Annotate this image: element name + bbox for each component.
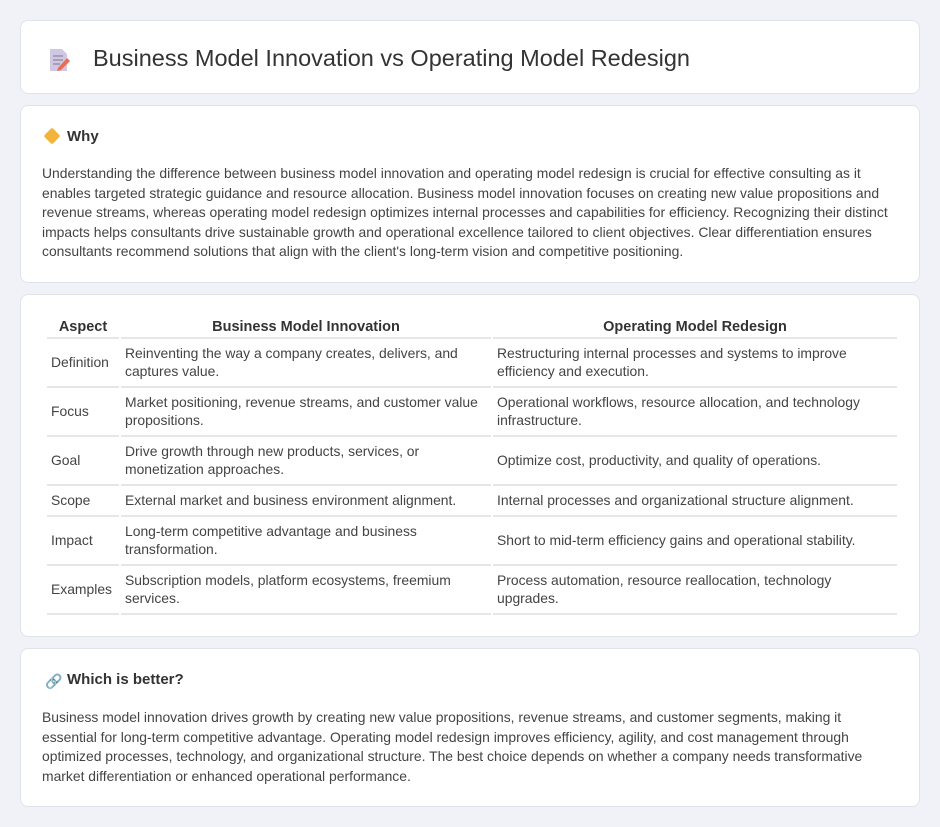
table: Operational workflows, resource allocation, and technology infrastructure.: [497, 394, 860, 428]
table: Business Model Innovation: [212, 318, 400, 334]
table: Focus: [51, 403, 89, 419]
table: Aspect: [59, 318, 107, 334]
panel: why: [20, 105, 920, 283]
table: Drive growth through new products, services, or monetization approaches.: [125, 443, 419, 477]
panel: comparison table: [20, 294, 920, 637]
icon: document: [50, 49, 70, 71]
icon: link: 🔗: [45, 673, 62, 689]
table: Scope: [51, 492, 90, 508]
table: [47, 318, 897, 615]
table: Process automation, resource reallocation, technology upgrades.: [497, 572, 831, 606]
table: Market positioning, revenue streams, and customer value propositions.: [125, 394, 478, 428]
text block: why: Understanding the difference between business model innovation and operating model redesign is crucial for effective consulting as it enables targeted strategic guidance and resource allocation. Business model innovation focuses on creating new value propositions and revenue streams, whereas operating model redesign optimizes internal processes and capabilities for efficiency. Recognizing their distinct impacts helps consultants drive sustainable growth and operational excellence tailored to client objectives. Clear differentiation ensures consultants recommend solutions that align with the client's long-term vision and competitive positioning.: [42, 165, 888, 259]
panel: title: [20, 20, 920, 94]
heading: why: Why: [67, 128, 99, 145]
table: Long-term competitive advantage and business transformation.: [125, 523, 417, 557]
table: Impact: [51, 532, 93, 548]
panel: which is better: [20, 648, 920, 807]
table: Subscription models, platform ecosystems, freemium services.: [125, 572, 451, 606]
table: Operating Model Redesign: [603, 318, 787, 334]
table: Short to mid-term efficiency gains and operational stability.: [497, 532, 856, 548]
table: Definition: [51, 354, 109, 370]
table: Goal: [51, 452, 80, 468]
table: Optimize cost, productivity, and quality of operations.: [497, 452, 821, 468]
text block: which is better: Business model innovation drives growth by creating new value propositions, revenue streams, and customer segments, making it essential for long-term competitive advantage. Operating model redesign improves efficiency, agility, and cost management through optimized processes, technology, and organizational structure. The best choice depends on whether a company needs transformative market differentiation or enhanced operational performance.: [42, 709, 862, 784]
heading: which is better: Which is better?: [67, 671, 184, 688]
title: Business Model Innovation vs Operating Model Redesign: [93, 45, 690, 71]
table: Internal processes and organizational structure alignment.: [497, 492, 854, 508]
table: Examples: [51, 581, 112, 597]
table: External market and business environment alignment.: [125, 492, 456, 508]
icon: diamond: [44, 128, 60, 144]
table: Restructuring internal processes and systems to improve efficiency and execution.: [497, 345, 847, 379]
table: Reinventing the way a company creates, delivers, and captures value.: [125, 345, 458, 379]
